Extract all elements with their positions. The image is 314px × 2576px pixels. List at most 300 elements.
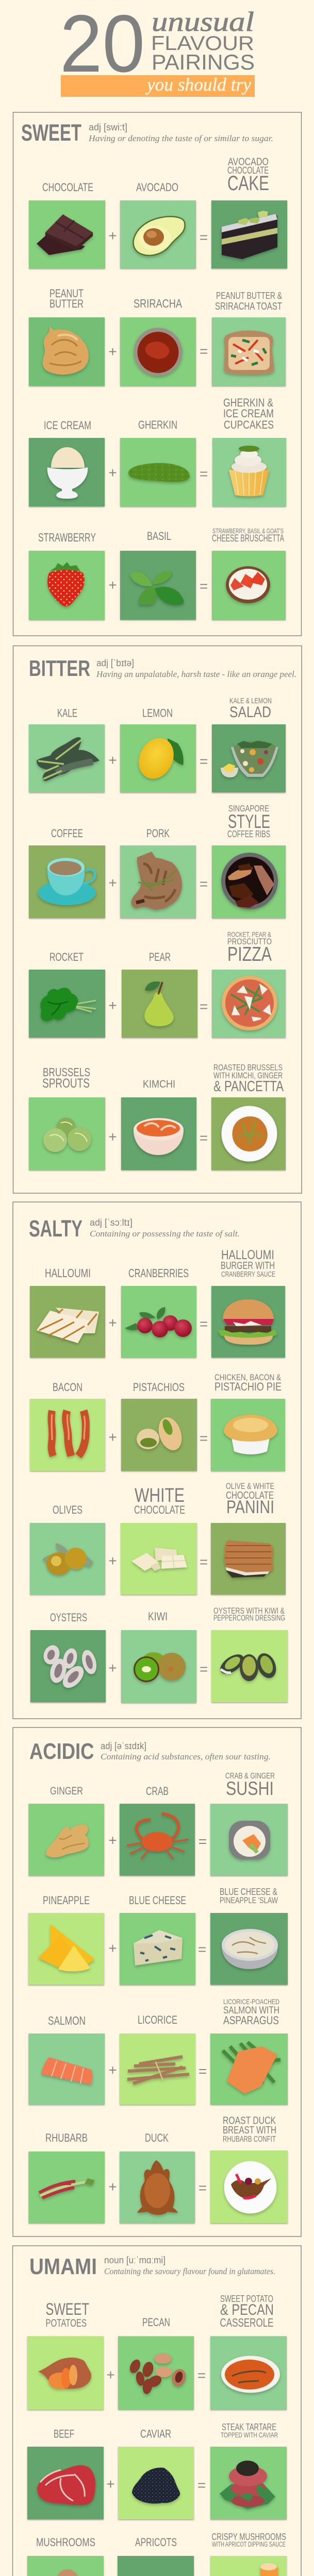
- label: gherkin and ice cream cupcakes: CUPCAKES: [224, 418, 274, 431]
- icon: panini: [224, 1540, 273, 1578]
- operator: equals: =: [197, 2477, 206, 2493]
- label: roast duck breast with rhubarb confit: ROAST DUCK: [223, 2114, 276, 2127]
- operator: equals: =: [199, 1833, 207, 1850]
- label: duck: DUCK: [145, 2131, 169, 2144]
- operator: equals: =: [198, 1941, 206, 1957]
- label: olives: OLIVES: [53, 1503, 82, 1516]
- label: sweet potatoes: SWEET: [45, 2300, 89, 2318]
- tile: slaw: [210, 1913, 288, 1985]
- operator: equals: =: [200, 1430, 208, 1446]
- icon: crispy mushrooms: [217, 2563, 278, 2576]
- tile: bruschetta: [212, 551, 286, 620]
- icon: gherkin cupcake: [229, 446, 269, 496]
- definition: [90, 1217, 240, 1239]
- tile: blue cheese: [120, 1913, 195, 1985]
- tile: sweet potatoes: [27, 2336, 104, 2410]
- label: olive and white chocolate panini: PANINI: [226, 1497, 274, 1517]
- operator: plus: +: [108, 997, 117, 1013]
- label: singapore style coffee ribs: COFFEE RIBS: [227, 829, 270, 839]
- label: blue cheese: BLUE CHEESE: [129, 1894, 186, 1907]
- label: gherkin and ice cream cupcakes: ICE CREAM: [223, 407, 274, 420]
- pairing: peanut butter + sriracha = toast: [29, 287, 286, 386]
- word class and phonetics: adj [ˈsɔːltɪ]: [90, 1217, 133, 1228]
- label: white chocolate: [134, 1485, 185, 1516]
- label: pineapple: PINEAPPLE: [43, 1894, 90, 1907]
- operator: equals: =: [200, 1554, 208, 1570]
- pairing: rocket + pear = pizza: [29, 930, 286, 1038]
- label: kale and lemon salad: [229, 697, 272, 721]
- label: sweet potato and pecan casserole: [220, 2294, 274, 2329]
- label: kale: KALE: [57, 707, 77, 719]
- label: avocado chocolate cake: CAKE: [227, 172, 269, 195]
- label: white chocolate: WHITE: [135, 1485, 185, 1506]
- label: roast duck breast with rhubarb confit: BREAST WITH: [223, 2124, 276, 2136]
- icon: oysters with dressing: [217, 1650, 279, 1681]
- label: white chocolate: CHOCOLATE: [134, 1503, 185, 1516]
- definition text: Having or denoting the taste of or similar to sugar.: [88, 133, 273, 143]
- label: avocado: AVOCADO: [136, 181, 178, 194]
- label: halloumi burger with cranberry sauce: [221, 1248, 275, 1279]
- icon: coffee ribs bowl: [221, 853, 278, 909]
- operator: plus: +: [108, 577, 117, 593]
- tile: duck: [120, 2151, 195, 2223]
- icon: peanut butter: [43, 326, 89, 375]
- operator: plus: +: [108, 1553, 117, 1569]
- operator: plus: +: [108, 344, 117, 360]
- heading: UMAMI: UMAMI: [29, 2254, 97, 2279]
- label: steak tartare topped with caviar: TOPPED WITH CAVIAR: [221, 2431, 278, 2439]
- pairing: salmon + licorice = poached salmon: [29, 1997, 288, 2105]
- label: roasted brussels with kimchi, ginger and pancetta: ROASTED BRUSSELS: [213, 1062, 283, 1073]
- operator: plus: +: [108, 875, 117, 891]
- tile: pizza: [212, 970, 286, 1038]
- label: sweet potatoes: POTATOES: [45, 2317, 87, 2329]
- operator: equals: =: [200, 229, 208, 245]
- tile: pecan: [118, 2336, 194, 2410]
- label: sweet potato and pecan casserole: & PECAN: [220, 2301, 274, 2318]
- label: peanut butter and sriracha toast: [215, 291, 282, 312]
- icon: beef: [37, 2465, 95, 2505]
- operator: plus: +: [106, 2367, 115, 2383]
- icon: cranberries: [125, 1307, 192, 1337]
- label: licorice: LICORICE: [138, 2013, 177, 2026]
- tile: peanut butter: [29, 317, 105, 386]
- label: rocket, pear and prosciutto pizza: PIZZA: [227, 943, 272, 965]
- label: halloumi burger with cranberry sauce: BURGER WITH: [221, 1260, 275, 1272]
- tile: basil: [120, 551, 196, 620]
- operator: equals: =: [200, 343, 208, 359]
- label: pistachios: PISTACHIOS: [133, 1381, 185, 1394]
- label: blue cheese and pineapple slaw: BLUE CHEESE &: [220, 1886, 277, 1897]
- title: FLAVOUR: FLAVOUR: [151, 32, 254, 55]
- icon: sushi roll: [229, 1821, 270, 1859]
- label: brussels sprouts: BRUSSELS: [43, 1065, 90, 1079]
- label: singapore style coffee ribs: [227, 803, 270, 839]
- operator: plus: +: [108, 1315, 117, 1331]
- label: peanut butter: [49, 287, 84, 310]
- label: sweet potato and pecan casserole: SWEET POTATO: [220, 2294, 273, 2304]
- operator: equals: =: [199, 2180, 207, 2196]
- label: roast duck breast with rhubarb confit: [223, 2114, 276, 2144]
- icon: olives: [42, 1543, 93, 1575]
- label: peanut butter and sriracha toast: PEANUT BUTTER &: [216, 291, 282, 301]
- icon: pistachio pie: [224, 1415, 277, 1454]
- tile: brussels sprouts: [29, 1097, 105, 1170]
- label: chicken, bacon and pistachio pie: PISTACHIO PIE: [214, 1380, 282, 1393]
- tile: pork: [120, 845, 196, 918]
- label: kale and lemon salad: SALAD: [229, 704, 271, 721]
- definition text: Containing the savoury flavour found in glutamates.: [104, 2266, 275, 2276]
- icon: pineapple: [38, 1924, 95, 1971]
- tile: panini: [211, 1523, 286, 1595]
- label: pecan: PECAN: [142, 2316, 170, 2329]
- label: steak tartare topped with caviar: [221, 2421, 278, 2439]
- icon: duck: [137, 2160, 178, 2215]
- label: chocolate: CHOCOLATE: [42, 181, 93, 194]
- operator: equals: =: [200, 998, 208, 1014]
- label: sweet potatoes: [45, 2300, 89, 2329]
- label: chicken, bacon and pistachio pie: [214, 1372, 282, 1393]
- panel frame: [13, 112, 301, 636]
- pairing: coffee + pork = ribs: [29, 803, 286, 918]
- label: ice cream: ICE CREAM: [44, 419, 91, 432]
- panel: sweet: [13, 112, 301, 636]
- label: olive and white chocolate panini: OLIVE & WHITE: [226, 1482, 274, 1491]
- icon: chocolate: [37, 214, 93, 255]
- icon: mushrooms: [40, 2569, 97, 2576]
- label: roasted brussels with kimchi, ginger and pancetta: WITH KIMCHI, GINGER: [213, 1071, 283, 1080]
- label: lemon: LEMON: [142, 707, 173, 719]
- icon: roast duck plate: [224, 2161, 276, 2213]
- label: crab and ginger sushi: CRAB & GINGER: [225, 1772, 275, 1781]
- label: roast duck breast with rhubarb confit: RHUBARB CONFIT: [223, 2135, 276, 2144]
- label: peanut butter and sriracha toast: SRIRACHA TOAST: [215, 301, 282, 312]
- pairing: kale + lemon = salad: [29, 697, 286, 792]
- operator: plus: +: [108, 1660, 117, 1676]
- pairing: oysters + kiwi = oysters with kiwi dressing: [30, 1606, 288, 1703]
- tile: licorice: [120, 2033, 195, 2105]
- tile: white chocolate: [121, 1523, 197, 1595]
- label: gherkin: GHERKIN: [138, 418, 177, 431]
- panel: acidic: [13, 1727, 301, 2236]
- tile: strawberry: [29, 551, 105, 620]
- pairing: olives + white chocolate = panini: [30, 1482, 286, 1595]
- label: crab and ginger sushi: [225, 1772, 275, 1799]
- pairing: bacon + pistachios = pie: [30, 1372, 285, 1471]
- tile: rocket: [29, 970, 105, 1038]
- label: peanut butter: PEANUT: [49, 287, 84, 300]
- tile: burger: [211, 1286, 285, 1358]
- tile: halloumi: [30, 1286, 105, 1358]
- icon: roasted brussels plate: [222, 1106, 277, 1161]
- icon: basil: [130, 571, 184, 605]
- label: strawberry, basil and goat's cheese bruschetta: STRAWBERRY, BASIL & GOAT'S: [212, 527, 284, 535]
- label: peanut butter: BUTTER: [49, 297, 84, 310]
- label: halloumi: HALLOUMI: [45, 1266, 91, 1280]
- word class and phonetics: noun [uːˈmɑːmi]: [104, 2255, 166, 2265]
- tile: pistachios: [121, 1399, 197, 1471]
- pairing: halloumi + cranberries = burger: [30, 1248, 285, 1358]
- label: olive and white chocolate panini: CHOCOLATE: [226, 1489, 274, 1501]
- panel: salty: [13, 1202, 301, 1719]
- tile: cake: [211, 200, 287, 268]
- label: kale and lemon salad: KALE & LEMON: [229, 697, 272, 705]
- label: avocado chocolate cake: [227, 157, 269, 195]
- label: pork: PORK: [146, 827, 170, 840]
- tile: oysters: [30, 1630, 106, 1702]
- label: beef: BEEF: [54, 2428, 74, 2440]
- tile: bacon: [30, 1399, 105, 1471]
- icon: avocado chocolate cake: [222, 211, 277, 259]
- tile: beef: [27, 2447, 104, 2519]
- panel frame: [13, 1727, 301, 2236]
- operator: plus: +: [108, 1832, 117, 1849]
- icon: casserole: [221, 2355, 280, 2393]
- operator: equals: =: [200, 578, 208, 594]
- operator: plus: +: [108, 1429, 117, 1445]
- tile: caviar: [118, 2447, 194, 2519]
- tile: gherkin: [120, 438, 196, 506]
- tile: oysters with kiwi dressing: [211, 1630, 288, 1702]
- definition: [101, 1741, 271, 1761]
- label: kiwi: KIWI: [148, 1610, 168, 1623]
- label: apricots: APRICOTS: [135, 2536, 177, 2549]
- tile: olives: [30, 1523, 105, 1595]
- label: crispy mushrooms with apricot dipping sauce: CRISPY MUSHROOMS: [211, 2532, 286, 2542]
- label: blue cheese and pineapple slaw: PINEAPPLE 'SLAW: [220, 1895, 278, 1905]
- tile: sushi: [210, 1804, 288, 1875]
- operator: plus: +: [108, 228, 117, 244]
- label: salmon: SALMON: [48, 2014, 86, 2027]
- label: licorice-poached salmon with asparagus: SALMON WITH: [223, 2005, 279, 2016]
- label: rocket, pear and prosciutto pizza: ROCKET, PEAR &: [227, 930, 271, 939]
- title: you should try: you should try: [145, 74, 251, 95]
- definition: [96, 658, 296, 679]
- panel frame: [12, 2246, 301, 2576]
- label: olive and white chocolate panini: [226, 1482, 274, 1517]
- icon: pecans: [128, 2353, 188, 2395]
- operator: equals: =: [199, 2063, 207, 2079]
- icon: pizza: [222, 976, 277, 1030]
- operator: plus: +: [108, 752, 117, 768]
- tile: roast duck: [210, 2150, 288, 2223]
- operator: equals: =: [200, 1661, 208, 1677]
- label: licorice-poached salmon with asparagus: [223, 1997, 279, 2027]
- definition text: Containing or possessing the taste of salt.: [90, 1229, 240, 1239]
- definition: [104, 2255, 275, 2276]
- label: sriracha: SRIRACHA: [134, 297, 183, 310]
- label: crab: CRAB: [146, 1785, 169, 1798]
- label: cranberries: CRANBERRIES: [128, 1266, 189, 1280]
- pairing: sweet potatoes + pecan = casserole: [27, 2294, 287, 2410]
- tile: ice cream: [29, 438, 105, 506]
- tile: avocado: [120, 200, 196, 268]
- label: caviar: CAVIAR: [140, 2428, 171, 2440]
- definition text: Containing acid substances, often sour tasting.: [101, 1752, 271, 1761]
- icon: oysters: [41, 1643, 99, 1692]
- operator: equals: =: [200, 876, 208, 892]
- tile: lemon: [120, 724, 196, 792]
- icon: sriracha bowl: [134, 328, 183, 376]
- tile: ginger: [29, 1804, 104, 1875]
- tile: kale: [29, 724, 105, 792]
- icon: avocado: [134, 216, 185, 256]
- icon: brussels sprouts: [43, 1117, 91, 1152]
- heading: SALTY: SALTY: [29, 1215, 82, 1242]
- label: oysters with kiwi and peppercorn dressing: OYSTERS WITH KIWI &: [213, 1606, 285, 1616]
- label: sweet potato and pecan casserole: CASSEROLE: [220, 2316, 273, 2329]
- tile: poached salmon: [210, 2033, 288, 2105]
- tile: cranberries: [121, 1286, 196, 1358]
- panel: umami: [12, 2246, 301, 2576]
- icon: pork chop: [131, 852, 182, 910]
- icon: crab: [127, 1814, 189, 1859]
- label: rhubarb: RHUBARB: [45, 2131, 88, 2144]
- operator: plus: +: [108, 2062, 117, 2078]
- label: strawberry, basil and goat's cheese bruschetta: [212, 527, 284, 544]
- pairing: chocolate + avocado = cake: [29, 157, 287, 268]
- label: basil: BASIL: [147, 530, 171, 543]
- label: strawberry: STRAWBERRY: [38, 531, 96, 544]
- label: avocado chocolate cake: CHOCOLATE: [227, 165, 269, 176]
- icon: licorice sticks: [127, 2057, 189, 2083]
- tile: pie: [211, 1399, 285, 1471]
- tile: kimchi: [121, 1097, 196, 1170]
- icon: steak tartare: [220, 2461, 275, 2509]
- icon: pistachios: [137, 1414, 186, 1453]
- operator: equals: =: [200, 1316, 208, 1332]
- word class and phonetics: adj [əˈsɪdɪk]: [101, 1741, 146, 1751]
- label: licorice-poached salmon with asparagus: ASPARAGUS: [223, 2014, 279, 2027]
- icon: kale: [37, 737, 100, 781]
- icon: kiwi: [134, 1652, 186, 1682]
- icon: salmon: [41, 2057, 92, 2084]
- tile: sriracha: [120, 317, 196, 386]
- label: ginger: GINGER: [50, 1785, 83, 1797]
- panel: bitter: [13, 646, 302, 1193]
- label: rocket, pear and prosciutto pizza: PROSCIUTTO: [227, 937, 272, 946]
- operator: plus: +: [108, 1129, 117, 1145]
- word class and phonetics: adj [swi:t]: [89, 122, 127, 132]
- label: avocado chocolate cake: AVOCADO: [228, 157, 269, 168]
- pairing: beef + caviar = steak tartare: [27, 2421, 287, 2519]
- icon: slaw bowl: [222, 1929, 278, 1969]
- panel frame: [13, 1202, 301, 1719]
- icon: halloumi: [37, 1308, 99, 1343]
- label: oysters with kiwi and peppercorn dressing: PEPPERCORN DRESSING: [213, 1614, 285, 1623]
- operator: plus: +: [106, 2476, 115, 2492]
- pairing: ginger + crab = sushi: [29, 1772, 288, 1875]
- tile: toast: [212, 317, 286, 386]
- tile: rhubarb: [29, 2151, 105, 2223]
- label: singapore style coffee ribs: STYLE: [228, 811, 270, 832]
- definition: [88, 122, 273, 143]
- operator: equals: =: [200, 1130, 208, 1146]
- tile: mushrooms: [27, 2556, 104, 2576]
- icon: sriracha toast: [224, 331, 274, 375]
- operator: equals: =: [200, 753, 208, 769]
- label: steak tartare topped with caviar: STEAK TARTARE: [222, 2421, 276, 2432]
- icon: bruschetta: [226, 566, 270, 603]
- title: unusual: unusual: [152, 6, 254, 37]
- pairing: strawberry + basil = bruschetta: [29, 527, 286, 620]
- label: roasted brussels with kimchi, ginger and pancetta: [213, 1062, 284, 1095]
- pairing: pineapple + blue cheese = slaw: [28, 1886, 288, 1985]
- icon: pear: [144, 981, 174, 1026]
- icon: sweet potatoes: [38, 2358, 91, 2389]
- tile: pineapple: [28, 1913, 104, 1985]
- pairing: rhubarb + duck = roast duck: [29, 2114, 288, 2223]
- operator: plus: +: [108, 2179, 117, 2195]
- label: kimchi: KIMCHI: [143, 1078, 175, 1090]
- title: PAIRINGS: PAIRINGS: [152, 50, 255, 74]
- label: oysters with kiwi and peppercorn dressing: [213, 1606, 285, 1623]
- pairing: mushrooms + apricots = crispy mushrooms: [27, 2532, 287, 2576]
- title block: [60, 0, 255, 97]
- tile: ribs: [212, 845, 286, 918]
- icon: gherkin: [128, 463, 190, 482]
- icon: rhubarb: [39, 2178, 95, 2198]
- operator: equals: =: [197, 2367, 206, 2383]
- icon: rocket leaves: [40, 988, 96, 1021]
- label: coffee: COFFEE: [51, 827, 83, 840]
- label: halloumi burger with cranberry sauce: CRANBERRY SAUCE: [221, 1270, 275, 1279]
- label: gherkin and ice cream cupcakes: [223, 396, 274, 431]
- icon: strawberry: [47, 562, 85, 606]
- word class and phonetics: adj [ˈbɪtə]: [96, 658, 134, 668]
- pairing: ice cream + gherkin = cupcakes: [29, 396, 286, 506]
- title: 20: 20: [60, 0, 145, 89]
- icon: kale and lemon salad: [221, 741, 278, 777]
- pairing: brussels sprouts + kimchi = pancetta: [29, 1062, 286, 1170]
- tile: chocolate: [29, 200, 105, 268]
- tile: pear: [122, 970, 197, 1038]
- panel frame: [13, 646, 302, 1193]
- icon: white chocolate: [131, 1548, 187, 1571]
- label: crispy mushrooms with apricot dipping sauce: [211, 2532, 286, 2548]
- label: halloumi burger with cranberry sauce: HALLOUMI: [221, 1248, 274, 1262]
- tile: crab: [120, 1804, 195, 1875]
- tile: coffee: [29, 845, 105, 918]
- label: brussels sprouts: [42, 1065, 90, 1091]
- heading: BITTER: BITTER: [29, 656, 90, 681]
- operator: equals: =: [200, 466, 208, 482]
- label: brussels sprouts: SPROUTS: [42, 1076, 90, 1091]
- tile: apricots: [118, 2556, 194, 2576]
- orange banner: [61, 75, 255, 97]
- heading: SWEET: SWEET: [21, 120, 81, 146]
- label: roasted brussels with kimchi, ginger and pancetta: & PANCETTA: [213, 1078, 284, 1095]
- label: crab and ginger sushi: SUSHI: [226, 1778, 274, 1799]
- tile: kiwi: [121, 1630, 196, 1703]
- label: mushrooms: MUSHROOMS: [36, 2536, 95, 2549]
- icon: coffee cup: [38, 858, 96, 905]
- tile: salmon: [29, 2033, 105, 2105]
- icon: blue cheese: [134, 1930, 183, 1965]
- icon: caviar: [132, 2468, 180, 2503]
- icon: salmon with asparagus: [223, 2042, 280, 2094]
- icon: halloumi burger: [218, 1299, 277, 1345]
- tile: salad: [212, 724, 286, 792]
- operator: plus: +: [108, 1940, 117, 1956]
- label: singapore style coffee ribs: SINGAPORE: [228, 803, 269, 814]
- label: blue cheese and pineapple slaw: [220, 1886, 278, 1905]
- icon: lemon: [133, 732, 184, 785]
- heading: ACIDIC: ACIDIC: [29, 1739, 94, 1764]
- icon: bacon: [52, 1411, 86, 1456]
- icon: kimchi bowl: [134, 1118, 184, 1155]
- tile: pancetta: [211, 1097, 286, 1170]
